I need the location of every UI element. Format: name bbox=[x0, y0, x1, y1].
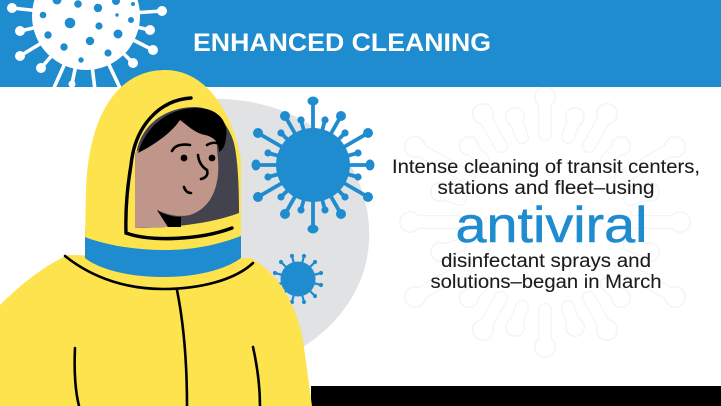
text block: description: solutions–began in March bbox=[430, 272, 662, 293]
visor window bbox=[135, 107, 239, 228]
hair bbox=[138, 108, 226, 153]
icon: large blue virus bbox=[252, 96, 374, 234]
visor outline bbox=[126, 98, 232, 239]
icon: small blue virus bbox=[273, 254, 323, 304]
bottom black bar bbox=[311, 386, 721, 406]
text block: description: Intense cleaning of transit centers, bbox=[392, 157, 700, 178]
hood bbox=[85, 70, 241, 250]
title: ENHANCED CLEANING bbox=[193, 29, 491, 57]
suit body bbox=[0, 255, 312, 406]
background ghost virus bbox=[399, 86, 691, 358]
figure in yellow protective suit bbox=[0, 70, 312, 406]
text block: description: antiviral bbox=[456, 197, 648, 253]
text block: description bbox=[392, 157, 700, 293]
text block: description: disinfectant sprays and bbox=[441, 251, 651, 272]
header band bbox=[0, 0, 721, 87]
blue collar bbox=[85, 230, 241, 277]
facial features bbox=[172, 143, 217, 193]
suit seam lines bbox=[65, 256, 260, 406]
face bbox=[135, 118, 218, 228]
text block: description: stations and fleet–using bbox=[438, 178, 654, 199]
neck shadow bbox=[157, 210, 181, 227]
icon: white virus in header bbox=[7, 0, 167, 90]
gray blob behind figure bbox=[200, 99, 369, 347]
